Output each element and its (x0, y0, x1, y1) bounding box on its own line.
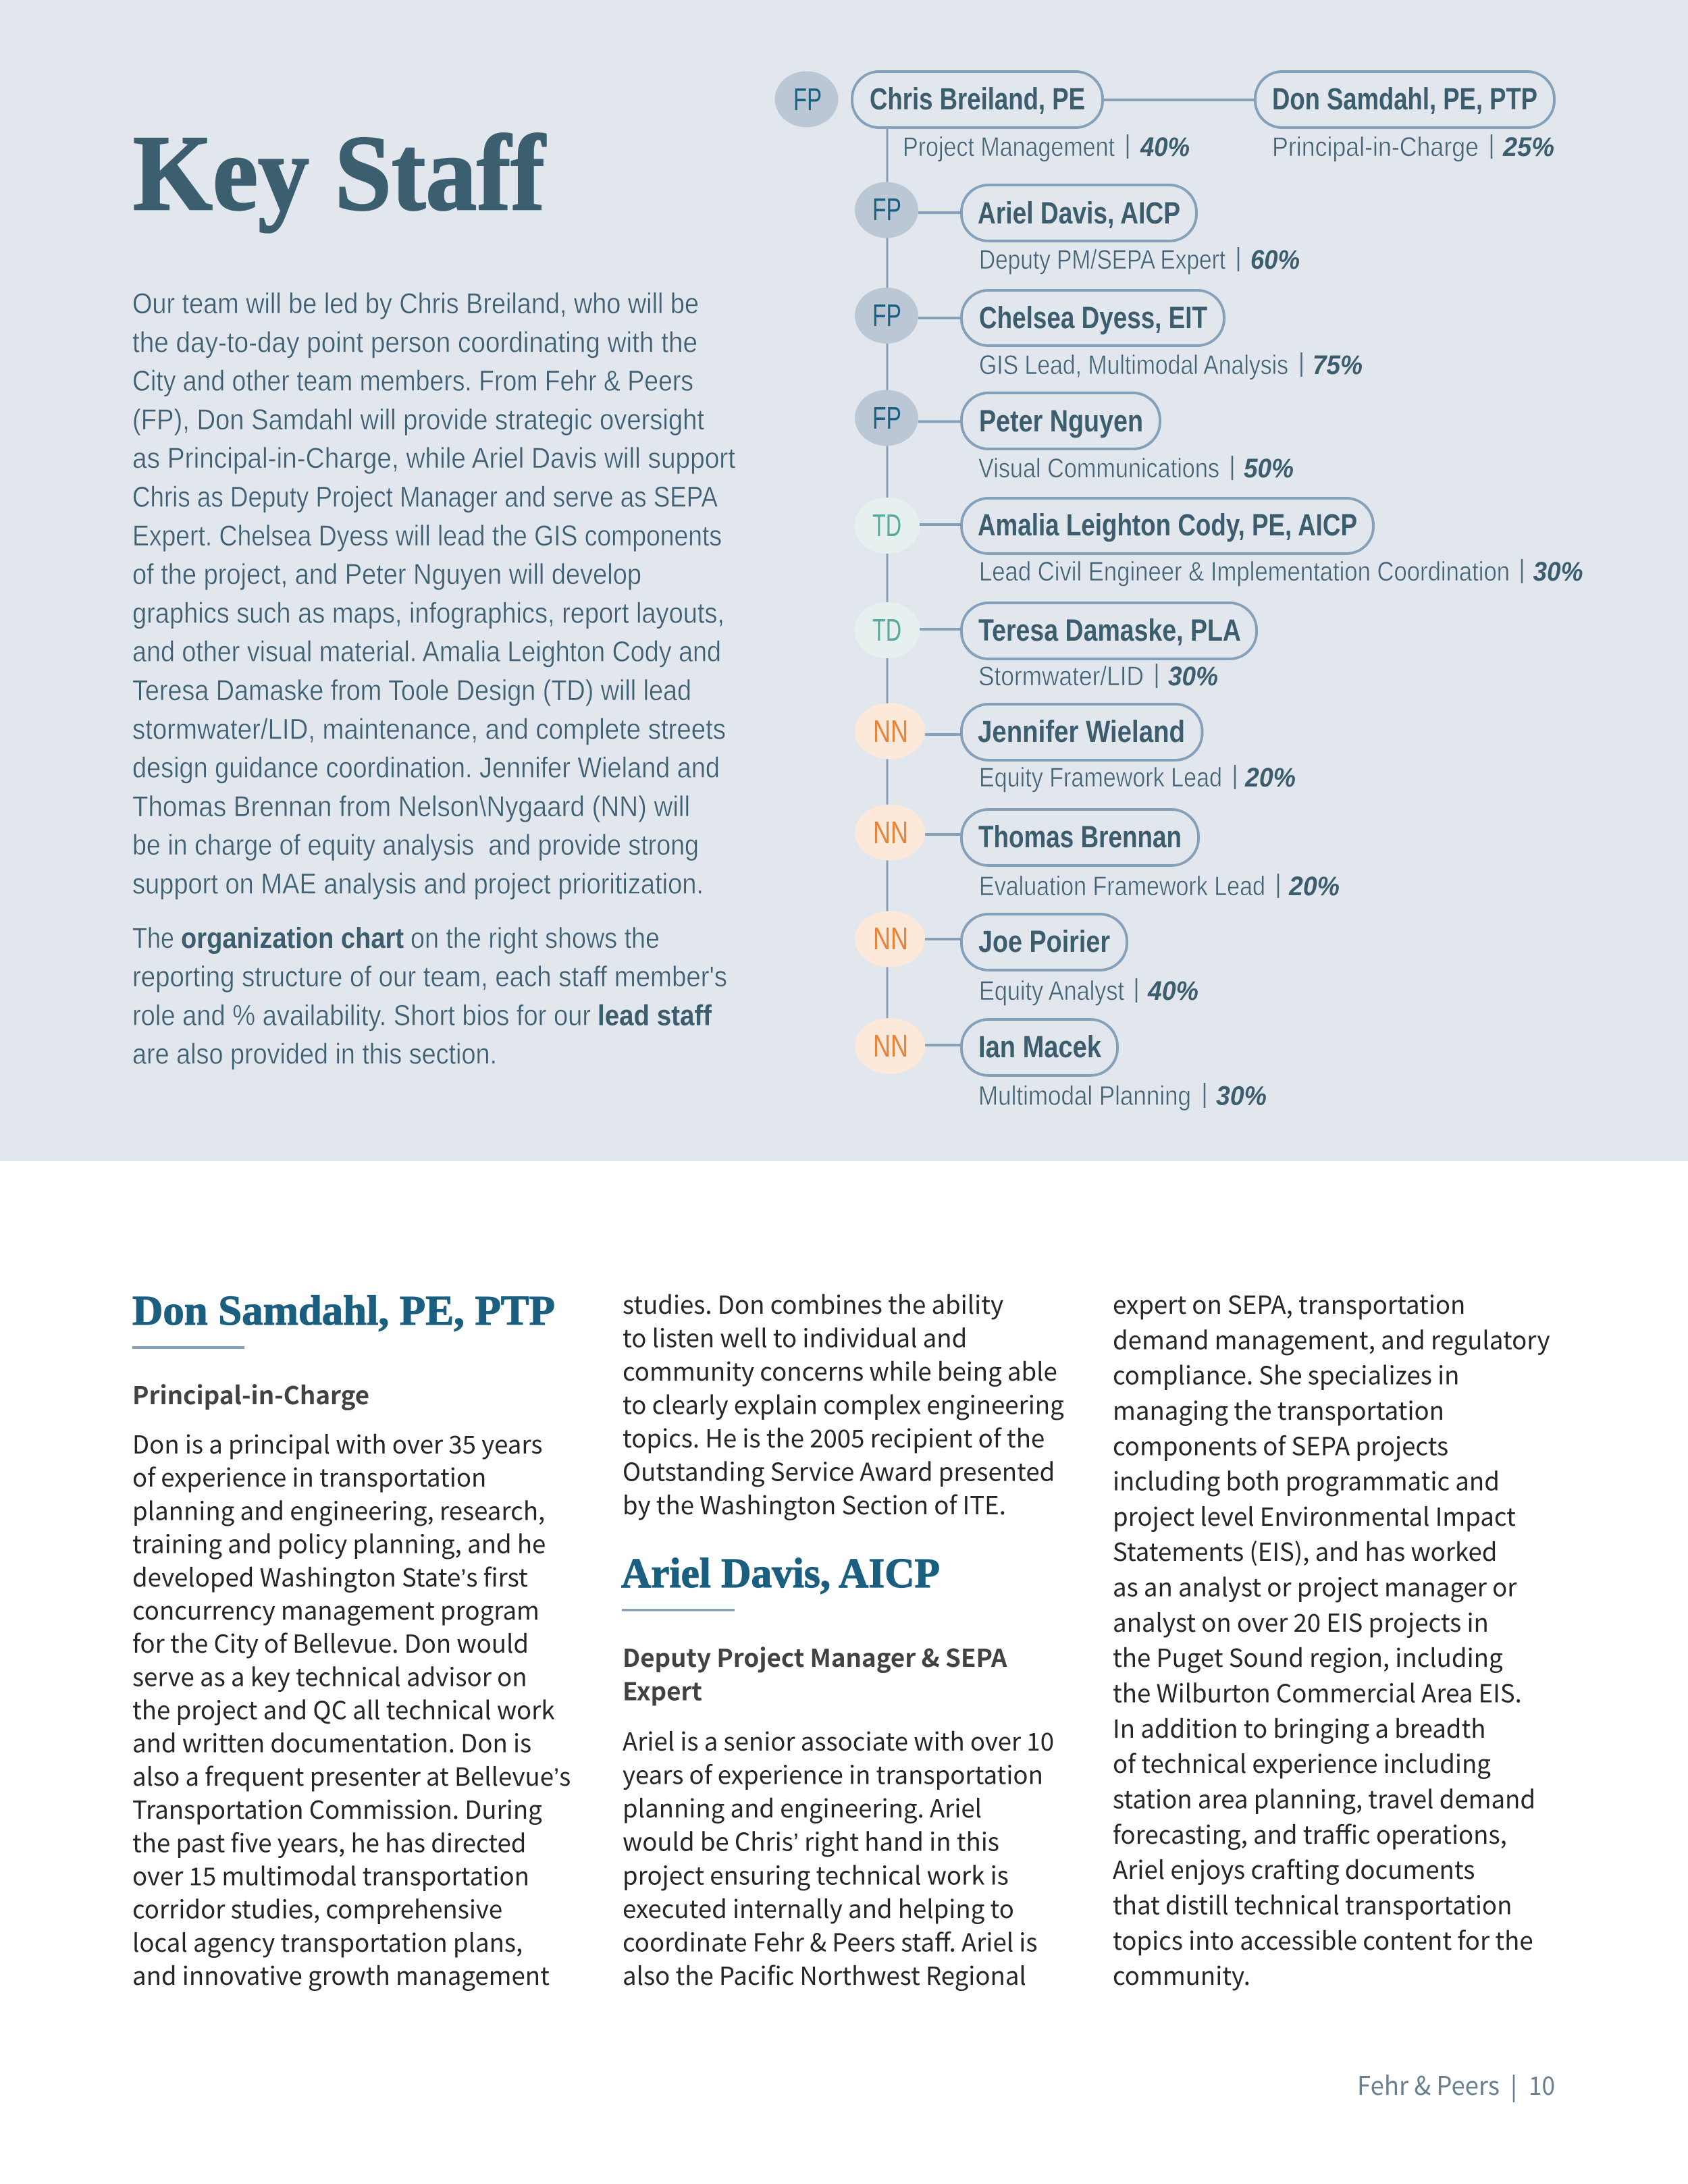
bio column 3: Ariel continued: as an analyst or project manager or (1113, 1568, 1517, 1604)
text block: team introduction: the day-to-day point person coordinating with the (132, 326, 697, 358)
bio column 3: Ariel continued: components of SEPA projects (1113, 1427, 1448, 1462)
text block: organization chart note (132, 922, 727, 1071)
staff: Teresa Damaske (855, 602, 1257, 691)
panel: top background (0, 0, 1688, 1161)
bio column 1: Don Samdahl (132, 1288, 571, 1992)
title: Key Staff (133, 113, 546, 233)
staff: Amalia Leighton Cody: TD (872, 508, 901, 543)
bio text: Don continued: to clearly explain complex engineering (623, 1386, 1064, 1422)
text block: organization chart note: organization chart (181, 922, 404, 955)
bio text: Don: Transportation Commission. During (132, 1790, 542, 1826)
staff: Chelsea Dyess: Chelsea Dyess, EIT (979, 300, 1207, 335)
bio text: Ariel: executed internally and helping to (623, 1890, 1014, 1925)
staff: Don Samdahl: 25% (1502, 132, 1554, 162)
reporting line (886, 128, 889, 1019)
bio text: Don: over 15 multimodal transportation (132, 1857, 529, 1893)
text block: team introduction: Thomas Brennan from Nelson\Nygaard (NN) will (132, 791, 690, 823)
staff: Chelsea Dyess: GIS Lead, Multimodal Analysis (979, 350, 1288, 380)
staff: Amalia Leighton Cody: 30% (1533, 557, 1583, 587)
role: Principal-in-Charge: Principal-in-Charge (132, 1375, 369, 1412)
text block: team introduction: City and other team members. From Fehr & Peers (132, 365, 693, 398)
staff: Peter Nguyen: 50% (1244, 454, 1294, 483)
staff: Ian Macek (855, 1018, 1267, 1111)
staff: Chelsea Dyess: FP (872, 298, 901, 333)
role: Ariel: Expert (623, 1672, 702, 1708)
bio text: Don: planning and engineering, research, (132, 1491, 545, 1527)
staff: Don Samdahl: Principal-in-Charge (1272, 132, 1479, 162)
bio column 3: Ariel continued: In addition to bringing a breadth (1113, 1709, 1485, 1745)
bio text: Ariel: also the Pacific Northwest Regional (623, 1956, 1026, 1992)
bio text: Ariel (623, 1722, 1054, 1992)
text block: team introduction: graphics such as maps, infographics, report layouts, (132, 597, 724, 629)
staff: Jennifer Wieland: Equity Framework Lead (979, 763, 1222, 793)
bio text: Don: the past five years, he has directed (132, 1823, 526, 1859)
staff: Joe Poirier: NN (873, 921, 908, 956)
staff: Chelsea Dyess: 75% (1313, 350, 1363, 380)
staff: Don Samdahl: Don Samdahl, PE, PTP (1272, 82, 1537, 116)
staff: Chris Breiland: FP (793, 82, 822, 117)
staff: Peter Nguyen: FP (872, 400, 901, 435)
bio column 3: Ariel continued: topics into accessible content for the (1113, 1921, 1533, 1957)
staff: Joe Poirier: Joe Poirier (978, 924, 1110, 959)
bio text: Ariel: years of experience in transportation (623, 1756, 1043, 1792)
text block: team introduction: support on MAE analysis and project prioritization. (132, 868, 704, 901)
text block: organization chart note: The (132, 922, 174, 955)
staff: Joe Poirier: 40% (1147, 976, 1198, 1006)
bio text: Don (132, 1425, 571, 1992)
staff: Thomas Brennan (855, 805, 1340, 901)
bio text: Don: local agency transportation plans, (132, 1923, 523, 1959)
staff: Ariel Davis (855, 182, 1300, 275)
staff: Don Samdahl (1255, 72, 1554, 162)
staff: Chris Breiland: Chris Breiland, PE (870, 82, 1085, 116)
bio text: Don: the project and QC all technical work (132, 1690, 555, 1727)
bio column 3: Ariel continued: that distill technical transportation (1113, 1886, 1512, 1921)
staff: Ian Macek: Ian Macek (978, 1030, 1102, 1064)
text block: team introduction: be in charge of equity analysis and provide strong (132, 829, 699, 861)
bio text: Don continued: to listen well to individual and (623, 1319, 967, 1355)
bio column 3: Ariel continued (1113, 1285, 1550, 1992)
bio text: Ariel: planning and engineering. Ariel (623, 1789, 982, 1825)
staff: Amalia Leighton Cody (855, 498, 1583, 587)
org chart (775, 72, 1583, 1111)
text block: team introduction: of the project, and Peter Nguyen will develop (132, 558, 641, 591)
staff: Thomas Brennan: 20% (1288, 872, 1340, 901)
staff: Ian Macek: NN (873, 1028, 908, 1063)
staff: Ian Macek: 30% (1216, 1082, 1267, 1111)
bio column 3: Ariel continued: including both programmatic and (1113, 1462, 1500, 1498)
bio column 3: Ariel continued: the Puget Sound region, including (1113, 1639, 1503, 1674)
text block: team introduction: and other visual material. Amalia Leighton Cody and (132, 636, 721, 668)
bio text: Don: for the City of Bellevue. Don would (132, 1624, 529, 1660)
bio column 3: Ariel continued: Statements (EIS), and has worked (1113, 1533, 1497, 1568)
bio column 3: Ariel continued: analyst on over 20 EIS projects in (1113, 1603, 1489, 1639)
role: Ariel (623, 1638, 1007, 1708)
bio column 3: Ariel continued: managing the transportation (1113, 1391, 1444, 1427)
bio text: Don continued: community concerns while being able (623, 1352, 1057, 1388)
staff: Jennifer Wieland: Jennifer Wieland (978, 714, 1185, 749)
text block: organization chart note: are also provided in this section. (132, 1038, 497, 1071)
bio text: Ariel: Ariel is a senior associate with over 10 (623, 1722, 1054, 1758)
text block: organization chart note: on the right shows the (411, 922, 660, 955)
bio text: Don: serve as a key technical advisor on (132, 1657, 527, 1693)
text block: team introduction: as Principal-in-Charge, while Ariel Davis will support (132, 442, 735, 475)
bio text: Don: concurrency management program (132, 1591, 539, 1627)
staff: Jennifer Wieland: 20% (1244, 763, 1296, 793)
bio column 3: Ariel continued: demand management, and regulatory (1113, 1321, 1550, 1356)
role: Ariel: Deputy Project Manager & SEPA (623, 1638, 1007, 1674)
staff: Peter Nguyen (855, 390, 1294, 483)
text block: team introduction: Expert. Chelsea Dyess will lead the GIS components (132, 520, 722, 552)
text block: team introduction: (FP), Don Samdahl will provide strategic oversight (132, 404, 704, 436)
staff: Chris Breiland: 40% (1140, 132, 1190, 162)
staff: Ariel Davis: FP (872, 192, 901, 227)
staff: Teresa Damaske: Teresa Damaske, PLA (978, 613, 1241, 647)
bio text: Ariel: would be Chris’ right hand in this (623, 1823, 999, 1859)
staff: Teresa Damaske: Stormwater/LID (978, 662, 1144, 691)
text block: team introduction (132, 288, 735, 901)
staff: Joe Poirier (855, 911, 1198, 1006)
bio column 3: Ariel continued: project level Environmental Impact (1113, 1497, 1516, 1533)
staff: Jennifer Wieland (855, 703, 1296, 793)
bio text: Don: developed Washington State’s first (132, 1558, 528, 1594)
staff: Amalia Leighton Cody: Amalia Leighton Cody, PE, AICP (978, 508, 1357, 542)
heading: Ariel Davis: Ariel Davis, AICP (621, 1551, 940, 1597)
staff: Thomas Brennan: Thomas Brennan (978, 820, 1182, 854)
bio text: Ariel: project ensuring technical work is (623, 1856, 1009, 1892)
bio column 3: Ariel continued: of technical experience including (1113, 1744, 1491, 1780)
bio column 3: Ariel continued: forecasting, and traffic operations, (1113, 1815, 1507, 1851)
staff: Ariel Davis: 60% (1250, 245, 1300, 275)
bio column 3: Ariel continued: expert on SEPA, transportation (1113, 1285, 1465, 1321)
bio text: Don: Don is a principal with over 35 years (132, 1425, 543, 1461)
bio text: Don continued: topics. He is the 2005 recipient of the (623, 1419, 1045, 1455)
staff: Ariel Davis: Ariel Davis, AICP (978, 196, 1180, 230)
bio text: Don continued (623, 1285, 1064, 1522)
connector: Chris to Don (1103, 99, 1255, 101)
bio text: Don continued: Outstanding Service Award presented (623, 1453, 1055, 1489)
heading: Don Samdahl: Don Samdahl, PE, PTP (132, 1288, 555, 1334)
bio column 2 (621, 1285, 1064, 1992)
staff: Chris Breiland: Project Management (903, 132, 1115, 162)
text block: organization chart note: reporting structure of our team, each staff member's (132, 961, 727, 993)
bio column 3: Ariel continued: station area planning, travel demand (1113, 1780, 1535, 1816)
bio text: Don continued: by the Washington Section of ITE. (623, 1486, 1006, 1522)
bio text: Don: training and policy planning, and he (132, 1525, 546, 1561)
footer: 10 (1529, 2065, 1555, 2102)
staff: Ariel Davis: Deputy PM/SEPA Expert (979, 245, 1225, 275)
staff: Joe Poirier: Equity Analyst (979, 976, 1124, 1006)
bio text: Don: and written documentation. Don is (132, 1724, 531, 1760)
staff: Teresa Damaske: 30% (1168, 662, 1218, 691)
staff: Thomas Brennan: Evaluation Framework Lead (979, 872, 1265, 901)
text block: team introduction: Our team will be led by Chris Breiland, who will be (132, 288, 699, 320)
text block: team introduction: Chris as Deputy Project Manager and serve as SEPA (132, 481, 718, 513)
text block: team introduction: stormwater/LID, maintenance, and complete streets (132, 713, 726, 745)
text block: team introduction: design guidance coordination. Jennifer Wieland and (132, 752, 720, 784)
text block: organization chart note: role and % availability. Short bios for our (132, 999, 591, 1032)
staff: Thomas Brennan: NN (873, 815, 908, 850)
bio text: Don continued: studies. Don combines the ability (623, 1285, 1003, 1321)
staff: Amalia Leighton Cody: Lead Civil Engineer & Implementation Coordination (979, 557, 1510, 587)
bio text: Don: and innovative growth management (132, 1956, 550, 1992)
bio column 3: Ariel continued: community. (1113, 1956, 1250, 1992)
staff: Jennifer Wieland: NN (873, 714, 908, 749)
bio text: Don: of experience in transportation (132, 1458, 486, 1494)
staff: Teresa Damaske: TD (872, 612, 901, 647)
bio text: Don: corridor studies, comprehensive (132, 1890, 502, 1926)
footer: Fehr & Peers (1357, 2065, 1500, 2102)
staff: Peter Nguyen: Peter Nguyen (979, 404, 1143, 438)
bio text: Ariel: coordinate Fehr & Peers staff. Ariel is (623, 1923, 1037, 1959)
bio column 3: Ariel continued: the Wilburton Commercial Area EIS. (1113, 1674, 1522, 1709)
text block: team introduction: Teresa Damaske from Toole Design (TD) will lead (132, 674, 691, 707)
staff: Chris Breiland (775, 72, 1190, 162)
staff: Ian Macek: Multimodal Planning (978, 1082, 1191, 1111)
bio column 3: Ariel continued: Ariel enjoys crafting documents (1113, 1850, 1475, 1886)
text block: organization chart note: lead staff (598, 999, 712, 1032)
staff: Chelsea Dyess (855, 288, 1363, 380)
bio text: Don: also a frequent presenter at Bellevue’s (132, 1757, 571, 1793)
bio column 3: Ariel continued: compliance. She specializes in (1113, 1356, 1459, 1392)
staff: Peter Nguyen: Visual Communications (978, 454, 1219, 483)
